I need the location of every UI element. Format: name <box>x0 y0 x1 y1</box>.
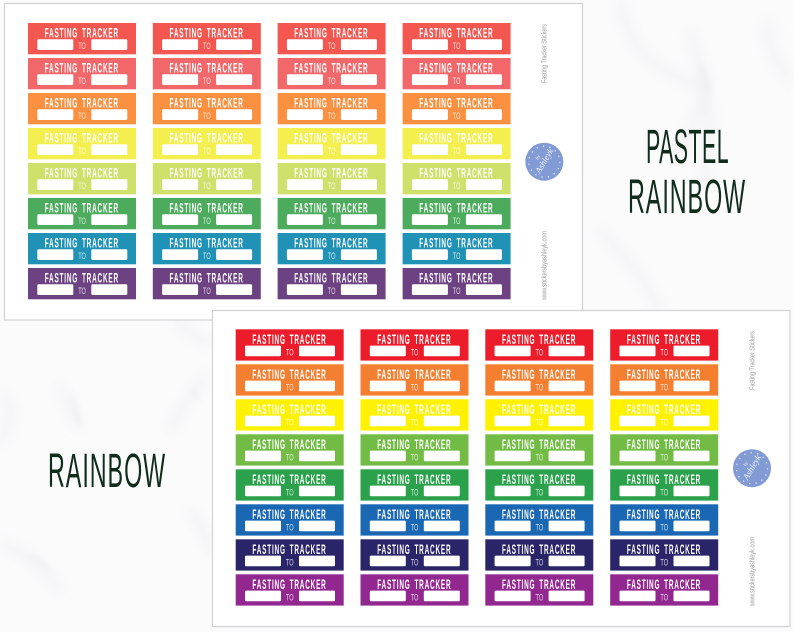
sticker column 4: TO <box>660 417 668 427</box>
sticker column 4 <box>403 23 511 299</box>
sticker column 3: FASTING TRACKER <box>502 507 576 523</box>
icon: logo badge <box>733 449 771 487</box>
sticker column 1: TO <box>286 347 294 357</box>
sticker column 3: FASTING TRACKER <box>502 542 576 558</box>
sticker column 4: FASTING TRACKER <box>627 367 701 383</box>
sticker column 4: TO <box>660 452 668 462</box>
sticker column 4: TO <box>453 216 461 226</box>
sticker column 3: FASTING TRACKER <box>502 577 576 593</box>
sticker column 1: FASTING TRACKER <box>252 507 327 523</box>
sticker column 1: TO <box>78 286 86 296</box>
sticker column 2: FASTING TRACKER <box>170 96 244 111</box>
sticker column 3: TO <box>535 382 543 392</box>
sticker column 1: TO <box>78 216 86 226</box>
sticker column 1: FASTING TRACKER <box>45 61 119 76</box>
sticker column 1: TO <box>286 557 294 567</box>
heading: rainbow: RAINBOW <box>48 445 166 498</box>
sticker column 4: TO <box>453 41 461 51</box>
sheet side label: title: Fasting Tracker Stickers <box>542 24 548 83</box>
sticker column 2: FASTING TRACKER <box>377 402 451 418</box>
sticker column 1: FASTING TRACKER <box>252 367 327 383</box>
sticker column 2: FASTING TRACKER <box>170 166 244 181</box>
sticker column 4: TO <box>453 146 461 156</box>
sticker column 3: TO <box>328 286 336 296</box>
sheet side label: title: Fasting Tracker Stickers <box>750 331 756 390</box>
sticker column 2: TO <box>411 592 418 602</box>
sticker column 3: FASTING TRACKER <box>294 166 368 181</box>
sticker column 4: FASTING TRACKER <box>627 402 701 418</box>
sticker column 3: FASTING TRACKER <box>502 437 576 453</box>
sticker column 2: TO <box>203 251 211 261</box>
sticker column 4: TO <box>660 522 668 532</box>
sticker column 3: FASTING TRACKER <box>294 61 368 76</box>
sticker column 4: FASTING TRACKER <box>627 332 701 348</box>
heading: rainbow (pastel label): RAINBOW <box>628 171 746 224</box>
sticker column 2: TO <box>203 286 211 296</box>
sticker column 3: FASTING TRACKER <box>294 271 368 286</box>
sticker column 3: TO <box>328 76 336 86</box>
sticker column 4: TO <box>660 347 668 357</box>
sticker column 2: FASTING TRACKER <box>377 577 451 593</box>
sticker column 1: FASTING TRACKER <box>45 26 119 41</box>
sticker column 1: FASTING TRACKER <box>45 201 119 216</box>
sticker column 2: FASTING TRACKER <box>377 542 451 558</box>
sticker column 2: TO <box>411 347 418 357</box>
sticker column 4: FASTING TRACKER <box>419 271 493 286</box>
sticker column 1: TO <box>78 111 86 121</box>
sticker column 3: TO <box>535 452 543 462</box>
sticker column 4: FASTING TRACKER <box>627 542 701 558</box>
sticker column 3: FASTING TRACKER <box>294 201 368 216</box>
sticker column 2: FASTING TRACKER <box>377 507 451 523</box>
sticker column 3: TO <box>535 592 543 602</box>
sticker column 4: TO <box>660 382 668 392</box>
sticker column 1: FASTING TRACKER <box>45 271 119 286</box>
sticker column 4: FASTING TRACKER <box>627 507 701 523</box>
icon: logo badge: Ashleyk <box>533 146 556 176</box>
sticker column 1: TO <box>78 41 86 51</box>
sticker column 1: FASTING TRACKER <box>252 472 327 488</box>
sticker column 4: FASTING TRACKER <box>419 166 493 181</box>
sticker column 3: TO <box>328 41 336 51</box>
sticker column 1: TO <box>78 76 86 86</box>
sticker column 4: FASTING TRACKER <box>627 577 701 593</box>
sticker column 2: TO <box>203 111 211 121</box>
sticker column 2: FASTING TRACKER <box>377 332 451 348</box>
sticker column 2: FASTING TRACKER <box>377 437 451 453</box>
sticker column 1: TO <box>78 146 86 156</box>
sticker column 4: TO <box>453 251 461 261</box>
sticker column 3: TO <box>535 417 543 427</box>
sticker column 1: TO <box>78 251 86 261</box>
sticker column 3: FASTING TRACKER <box>294 96 368 111</box>
sticker column 2: TO <box>411 557 418 567</box>
sticker column 2: TO <box>411 522 418 532</box>
sticker column 3: TO <box>535 557 543 567</box>
sticker column 1: TO <box>286 487 294 497</box>
sticker column 4: FASTING TRACKER <box>419 26 493 41</box>
sticker column 3: TO <box>535 347 543 357</box>
sticker column 3: FASTING TRACKER <box>294 131 368 146</box>
sticker column 4 <box>610 329 718 606</box>
sticker column 3: TO <box>328 251 336 261</box>
icon: logo badge: by <box>743 460 750 468</box>
sticker column 4: TO <box>660 557 668 567</box>
sticker column 4: FASTING TRACKER <box>627 437 701 453</box>
sticker column 4: TO <box>660 592 668 602</box>
sticker column 2: FASTING TRACKER <box>170 271 244 286</box>
sticker column 3: FASTING TRACKER <box>294 236 368 251</box>
sticker column 1: FASTING TRACKER <box>45 131 119 146</box>
sticker column 3: TO <box>535 522 543 532</box>
sticker column 2: TO <box>411 487 418 497</box>
sticker column 4: FASTING TRACKER <box>419 61 493 76</box>
sticker column 4: TO <box>453 76 461 86</box>
sticker column 2: FASTING TRACKER <box>170 26 244 41</box>
sticker column 2 <box>153 23 261 299</box>
sticker column 3: FASTING TRACKER <box>502 402 576 418</box>
sticker column 3: FASTING TRACKER <box>294 26 368 41</box>
sticker column 2: FASTING TRACKER <box>377 472 451 488</box>
sticker column 3: TO <box>328 146 336 156</box>
sticker column 2: TO <box>203 181 211 191</box>
sticker column 2: TO <box>411 417 418 427</box>
sticker column 3: FASTING TRACKER <box>502 472 576 488</box>
sticker column 1: TO <box>78 181 86 191</box>
sticker column 3: TO <box>328 216 336 226</box>
sticker column 1: TO <box>286 417 294 427</box>
panel: rainbow sticker sheet <box>212 310 790 626</box>
sticker column 3: TO <box>328 181 336 191</box>
sheet side label: website: www.stickersbyashleyk.com <box>750 537 756 607</box>
sticker column 1: TO <box>286 522 294 532</box>
sticker column 2: TO <box>203 76 211 86</box>
sticker column 1: FASTING TRACKER <box>252 402 327 418</box>
icon: logo badge: by <box>535 154 542 161</box>
sticker column 1: TO <box>286 452 294 462</box>
sticker column 2: FASTING TRACKER <box>377 367 451 383</box>
sticker column 1: FASTING TRACKER <box>45 96 119 111</box>
sticker column 2: FASTING TRACKER <box>170 61 244 76</box>
sticker column 3: FASTING TRACKER <box>502 367 576 383</box>
sticker column 3: FASTING TRACKER <box>502 332 576 348</box>
sticker column 4: FASTING TRACKER <box>419 201 493 216</box>
sticker column 4: TO <box>453 111 461 121</box>
sticker column 3: TO <box>535 487 543 497</box>
icon: logo badge: Ashleyk <box>740 452 763 482</box>
sticker column 2 <box>360 329 468 606</box>
sticker column 3: TO <box>328 111 336 121</box>
icon: logo badge <box>525 143 563 181</box>
sticker column 2: FASTING TRACKER <box>170 131 244 146</box>
sticker column 4: FASTING TRACKER <box>419 236 493 251</box>
sheet side label: website: www.stickersbyashleyk.com <box>542 231 548 301</box>
sticker column 1: FASTING TRACKER <box>252 577 327 593</box>
sticker column 1: FASTING TRACKER <box>252 332 327 348</box>
sticker column 2: FASTING TRACKER <box>170 236 244 251</box>
sticker column 1: FASTING TRACKER <box>45 166 119 181</box>
sticker column 2: TO <box>203 146 211 156</box>
sticker column 1 <box>236 329 344 606</box>
sticker column 1: FASTING TRACKER <box>252 542 327 558</box>
sticker column 1: FASTING TRACKER <box>252 437 327 453</box>
sticker column 2: TO <box>203 216 211 226</box>
sticker column 4: TO <box>453 286 461 296</box>
sticker column 4: TO <box>660 487 668 497</box>
sticker column 4: FASTING TRACKER <box>419 131 493 146</box>
sticker column 1: FASTING TRACKER <box>45 236 119 251</box>
sticker column 4: FASTING TRACKER <box>627 472 701 488</box>
sticker column 2: TO <box>203 41 211 51</box>
panel: pastel rainbow sticker sheet <box>4 4 582 320</box>
sticker column 1: TO <box>286 592 294 602</box>
sticker column 4: TO <box>453 181 461 191</box>
sticker column 3 <box>278 23 386 299</box>
heading: pastel: PASTEL <box>646 119 729 173</box>
sticker column 2: FASTING TRACKER <box>170 201 244 216</box>
sticker column 3 <box>485 329 593 606</box>
sticker column 1: TO <box>286 382 294 392</box>
sticker column 2: TO <box>411 382 418 392</box>
sticker column 2: TO <box>411 452 418 462</box>
sticker column 1 <box>28 23 136 299</box>
sticker column 4: FASTING TRACKER <box>419 96 493 111</box>
